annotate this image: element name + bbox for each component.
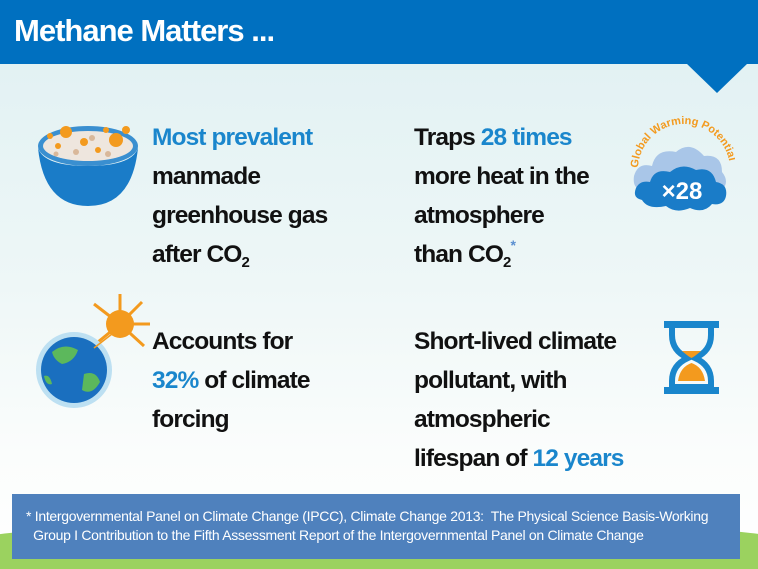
icon: cloud x28	[630, 116, 735, 211]
title: Methane Matters ...	[14, 13, 274, 48]
text: accounts for: 32% of climate	[152, 367, 310, 394]
text: most prevalent	[152, 124, 328, 271]
text: most prevalent: greenhouse gas	[152, 202, 327, 229]
text: accounts for	[152, 328, 310, 433]
text: short-lived: Short-lived climate	[414, 328, 616, 355]
text: traps 28 times: Traps 28 times	[414, 124, 572, 151]
header banner	[0, 0, 758, 64]
text: traps 28 times	[414, 124, 589, 271]
icon: cloud x28: ×28	[662, 178, 702, 205]
text: short-lived: lifespan of 12 years	[414, 445, 623, 472]
text: most prevalent: manmade	[152, 163, 260, 190]
header notch	[687, 64, 747, 93]
icon: hourglass	[664, 321, 719, 394]
footnote text: * Intergovernmental Panel on Climate Change (IPCC), Climate Change 2013: The Physical Science Basis-Working	[26, 508, 708, 524]
text: traps 28 times: more heat in the	[414, 163, 589, 190]
text: short-lived	[414, 328, 624, 472]
text: short-lived: atmospheric	[414, 406, 550, 433]
icon: earth and sun	[36, 294, 150, 408]
footnote box	[12, 494, 740, 559]
text: accounts for: forcing	[152, 406, 229, 433]
background grass	[0, 520, 758, 569]
footnote text: Group I Contribution to the Fifth Assessment Report of the Intergovernmental Panel on Climate Change	[33, 527, 644, 543]
footnote text	[26, 508, 708, 543]
icon: bowl of molecules	[38, 126, 138, 206]
text: traps 28 times: than CO2*	[414, 237, 515, 271]
text: short-lived: pollutant, with	[414, 367, 567, 394]
text: most prevalent: Most prevalent	[152, 124, 312, 151]
text: traps 28 times: atmosphere	[414, 202, 544, 229]
text: most prevalent: after CO2	[152, 241, 249, 271]
text: accounts for: Accounts for	[152, 328, 292, 355]
